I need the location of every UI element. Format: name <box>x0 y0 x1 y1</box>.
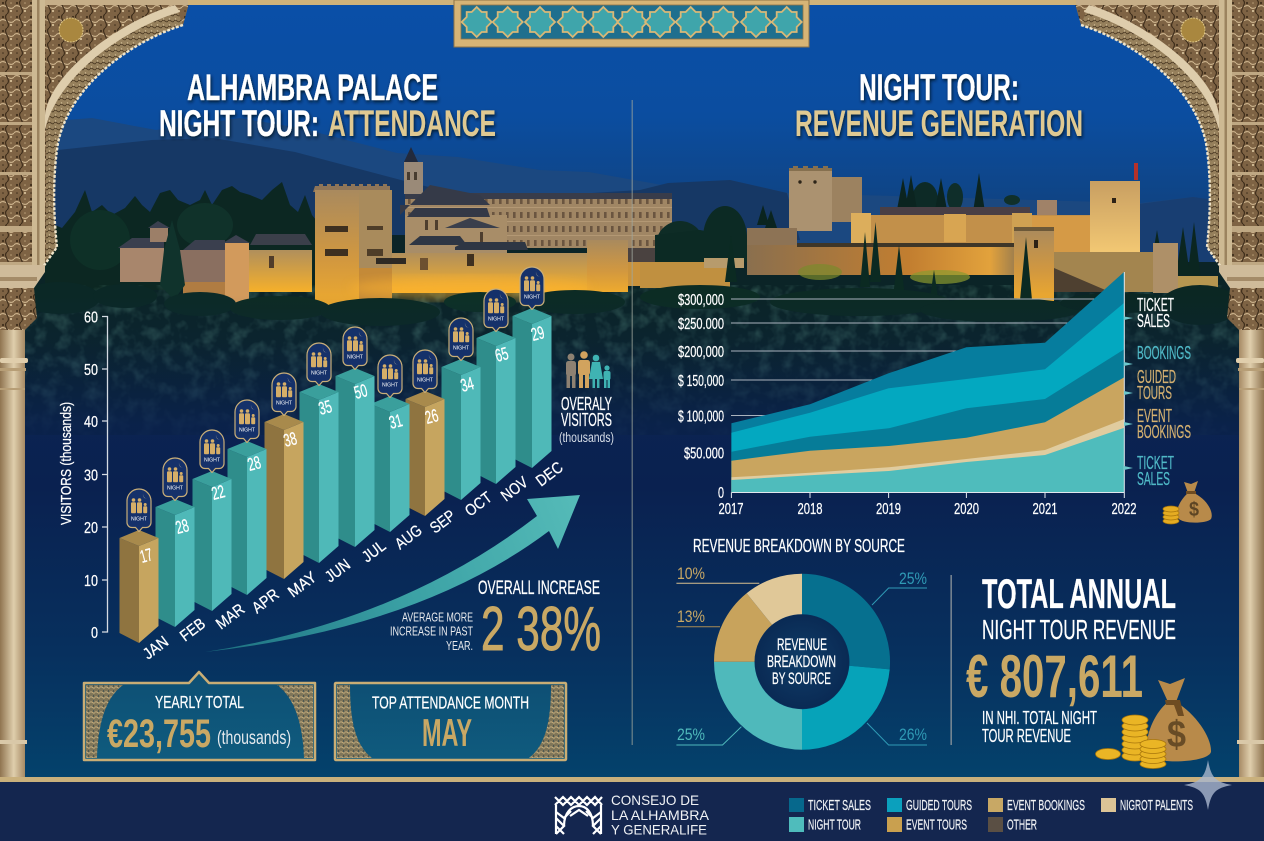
bar: May: MAY <box>285 569 320 601</box>
legend: TICKET SALES <box>808 797 871 814</box>
total annual revenue: TOUR REVENUE <box>982 726 1071 746</box>
legend: NIGROT PALENTS <box>1120 797 1193 814</box>
series labels <box>1124 295 1191 489</box>
legend: EVENT BOOKINGS <box>1007 797 1085 814</box>
area: guided tours <box>731 377 1124 492</box>
series labels: BOOKINGS <box>1137 422 1191 442</box>
area: ticket sales top <box>731 272 1124 492</box>
bar: Aug: AUG <box>392 522 426 553</box>
callout: overall increase: YEAR. <box>446 638 473 653</box>
y axis: visitors: 0 <box>91 625 98 642</box>
total annual revenue <box>966 570 1176 746</box>
donut callouts: 25% <box>899 569 927 588</box>
bar: May <box>264 373 320 601</box>
callout: overall increase <box>390 578 601 664</box>
donut centre <box>755 615 849 709</box>
top ornament panel <box>454 0 809 47</box>
series labels: GUIDED <box>1137 367 1176 387</box>
courtyard buildings <box>405 208 507 255</box>
palace of Charles V <box>405 193 672 248</box>
x axis: 2021 <box>1032 501 1058 518</box>
slice: event bookings <box>714 593 772 662</box>
x axis: 2022 <box>1112 501 1136 518</box>
series labels: TICKET <box>1137 295 1174 315</box>
bar: Nov <box>476 289 532 505</box>
bar: Oct: OCT <box>462 489 496 520</box>
y axis: visitors: 60 <box>84 310 98 326</box>
legend <box>789 797 1193 834</box>
title: revenue: REVENUE GENERATION <box>795 103 1083 144</box>
logo text: CONSEJO DE <box>611 792 699 808</box>
lit lower wall <box>376 242 588 293</box>
bar: Dec: DEC <box>533 459 567 490</box>
y axis: visitors: 30 <box>84 468 98 484</box>
area: bright teal <box>731 303 1124 492</box>
panel: top attendance month <box>335 683 566 760</box>
donut chart <box>714 574 890 750</box>
total annual revenue: IN NHI. TOTAL NIGHT <box>982 708 1097 728</box>
title: revenue: NIGHT TOUR: <box>859 67 1019 108</box>
x axis <box>718 272 1136 518</box>
gridlines and y labels: $ 100,000 <box>678 408 724 426</box>
total annual revenue: € 807,611 <box>966 643 1143 710</box>
text: overall visitors: VISITORS <box>561 410 612 430</box>
bar: Nov: 65 <box>493 343 511 366</box>
bar: Jul <box>336 327 389 566</box>
logo text: Y GENERALIFE <box>611 822 707 838</box>
area: event bookings <box>731 419 1124 492</box>
panel: left hillside forest <box>20 182 645 435</box>
bar: Feb <box>156 458 209 645</box>
x axis: 2019 <box>876 501 901 518</box>
heading: revenue breakdown: REVENUE BREAKDOWN BY SOURCE <box>693 536 905 556</box>
lit bushes <box>798 264 970 284</box>
bar: Oct: 34 <box>458 373 476 396</box>
x axis: 2020 <box>954 501 979 518</box>
bar: May: NIGHT <box>276 400 293 406</box>
slice: other <box>747 574 802 625</box>
y axis: visitors: VISITORS (thousands) <box>58 402 75 525</box>
upper wall <box>851 200 1091 254</box>
bar: Jan <box>120 489 172 663</box>
x axis: 2017 <box>718 501 744 518</box>
slice: ticket sales <box>802 574 890 669</box>
panel: left palace <box>118 147 690 307</box>
arrow: growth trend <box>205 495 580 652</box>
donut callouts: 10% <box>677 564 705 583</box>
icon: small money bag: $ <box>1189 499 1199 521</box>
bar: Sep: NIGHT <box>417 378 434 384</box>
panel: right fortress <box>640 163 1218 301</box>
panel: yearly total: €23,755 <box>107 712 211 756</box>
title: attendance: ALHAMBRA PALACE <box>187 67 438 108</box>
bar: Jul: 50 <box>352 380 370 403</box>
keep tower <box>789 166 862 231</box>
main tower <box>313 184 392 307</box>
donut chart: BY SOURCE <box>772 669 831 688</box>
panel: yearly total: (thousands) <box>217 728 291 749</box>
donut callouts: 25% <box>677 725 705 744</box>
logo: lattice arch <box>555 797 602 834</box>
y axis: visitors: 10 <box>84 573 98 590</box>
y axis: visitors <box>58 310 108 642</box>
sparkle <box>1184 760 1232 810</box>
slice: night tour <box>714 662 802 750</box>
bar: Apr: APR <box>249 586 283 617</box>
slice: guided tours <box>802 666 890 750</box>
bar: Jul: NIGHT <box>347 354 364 360</box>
bar: Sep: SEP <box>427 507 459 537</box>
bar: Mar: MAR <box>213 601 248 633</box>
title: revenue <box>795 67 1083 144</box>
legend: EVENT TOURS <box>906 816 967 834</box>
callout: overall increase: 2 38% <box>481 595 601 664</box>
divider <box>950 575 952 745</box>
bar: Jun: 35 <box>316 396 334 419</box>
bar: Sep: 26 <box>423 405 441 428</box>
panel: top attendance month: TOP ATTENDANCE MONTH <box>372 692 529 712</box>
series labels: SALES <box>1137 469 1170 489</box>
gate tower <box>1014 227 1054 301</box>
panel: foreground trees <box>20 220 1240 326</box>
legend: NIGHT TOUR <box>808 816 861 834</box>
series labels: EVENT <box>1137 406 1172 426</box>
bar: Dec: NIGHT <box>524 294 541 300</box>
gridlines and y labels: 0 <box>718 485 724 502</box>
panel: mountains <box>40 118 1215 265</box>
bar: Nov: NIGHT <box>488 316 505 322</box>
gridlines and y labels: $300,000 <box>678 292 724 309</box>
callout: overall increase: INCREASE IN PAST <box>390 624 473 638</box>
icon: money bag and coins <box>1096 678 1211 768</box>
gridlines and y labels <box>678 292 1100 502</box>
footer band <box>0 777 1264 841</box>
callout: overall increase: OVERALL INCREASE <box>478 578 600 599</box>
text: overall visitors: (thousands) <box>559 430 614 445</box>
bar: Sep <box>406 350 459 537</box>
bar: Nov: NOV <box>498 474 532 505</box>
text: overall visitors: OVERALY <box>561 394 612 414</box>
bar: Jan: NIGHT <box>131 516 148 522</box>
area: ticket sales base <box>731 428 1124 492</box>
bar: Mar <box>192 430 248 633</box>
gridlines and y labels: $200,000 <box>678 344 724 361</box>
x axis: 2018 <box>798 501 822 518</box>
bar: Jan: JAN <box>140 633 172 663</box>
callout: overall increase: AVERAGE MORE <box>402 610 473 624</box>
church tower <box>404 147 423 194</box>
bar: Feb: 28 <box>173 515 191 538</box>
donut chart: BREAKDOWN <box>767 652 836 671</box>
panel: yearly total: YEARLY TOTAL <box>155 692 244 712</box>
bar: Aug: NIGHT <box>382 382 399 388</box>
title: attendance: ATTENDANCE <box>328 103 496 144</box>
east wall <box>1054 243 1218 293</box>
text: overall visitors <box>559 394 614 445</box>
bar: Aug: 31 <box>387 410 405 433</box>
gridlines and y labels: $50.000 <box>684 446 724 462</box>
area: bookings <box>731 349 1124 492</box>
icon: money bag and coins: $ <box>1167 714 1186 756</box>
bar: Apr: 28 <box>245 452 263 475</box>
bar: Dec <box>512 267 567 490</box>
bar: Apr <box>228 400 283 617</box>
right arch <box>1074 0 1264 778</box>
y axis: visitors: 20 <box>84 520 98 537</box>
series labels: BOOKINGS <box>1137 343 1191 363</box>
donut callouts <box>676 564 927 745</box>
panel: navy lower background <box>0 295 1264 778</box>
series labels: SALES <box>1137 311 1170 331</box>
panel: top attendance month: MAY <box>422 712 472 755</box>
left buildings <box>118 221 312 305</box>
logo text <box>611 792 710 838</box>
bar: Feb: NIGHT <box>167 486 184 492</box>
glow <box>350 276 590 300</box>
area chart: revenue <box>678 272 1136 518</box>
series labels: TOURS <box>1137 383 1172 403</box>
donut callouts: 26% <box>899 725 927 744</box>
left arch <box>0 0 190 778</box>
legend: OTHER <box>1007 816 1037 834</box>
icon: family visitors <box>566 351 610 388</box>
panel: yearly total <box>84 672 315 760</box>
bar: Jun: JUN <box>322 556 354 586</box>
bar: Mar: 22 <box>209 481 227 504</box>
y axis: visitors: 40 <box>84 414 98 431</box>
bar: Jan: 17 <box>138 544 155 567</box>
bar: Dec: 29 <box>529 322 547 345</box>
bar: Oct <box>442 318 496 520</box>
east tower and wall <box>587 240 690 292</box>
tall bright tower <box>1090 163 1140 253</box>
title: attendance <box>159 67 496 144</box>
bar: Mar: NIGHT <box>204 458 221 464</box>
bar: Jul: JUL <box>359 538 389 566</box>
top gold bar <box>188 0 1076 5</box>
legend: GUIDED TOURS <box>906 797 972 814</box>
lower walls <box>640 228 1017 288</box>
y axis: visitors: 50 <box>84 362 98 379</box>
bar: Jun <box>300 343 354 586</box>
bar: Feb: FEB <box>177 615 209 645</box>
panel: right hillside forest <box>640 173 1245 435</box>
bar: Apr: NIGHT <box>239 428 256 434</box>
title: attendance: NIGHT TOUR: <box>159 103 319 144</box>
bar: Oct: NIGHT <box>453 346 470 352</box>
divider <box>632 100 633 745</box>
bar: Aug <box>370 355 426 553</box>
donut chart: REVENUE <box>777 635 827 654</box>
icon: small money bag <box>1163 481 1212 524</box>
cypresses <box>725 222 1032 300</box>
donut callouts: 13% <box>677 607 705 626</box>
series labels: TICKET <box>1137 453 1174 473</box>
gridlines and y labels: $250.000 <box>678 316 724 333</box>
gridlines and y labels: $ 150,000 <box>678 373 724 390</box>
bar: May: 38 <box>281 428 299 451</box>
bar: Jun: NIGHT <box>311 370 328 376</box>
logo text: LA ALHAMBRA <box>611 807 710 823</box>
